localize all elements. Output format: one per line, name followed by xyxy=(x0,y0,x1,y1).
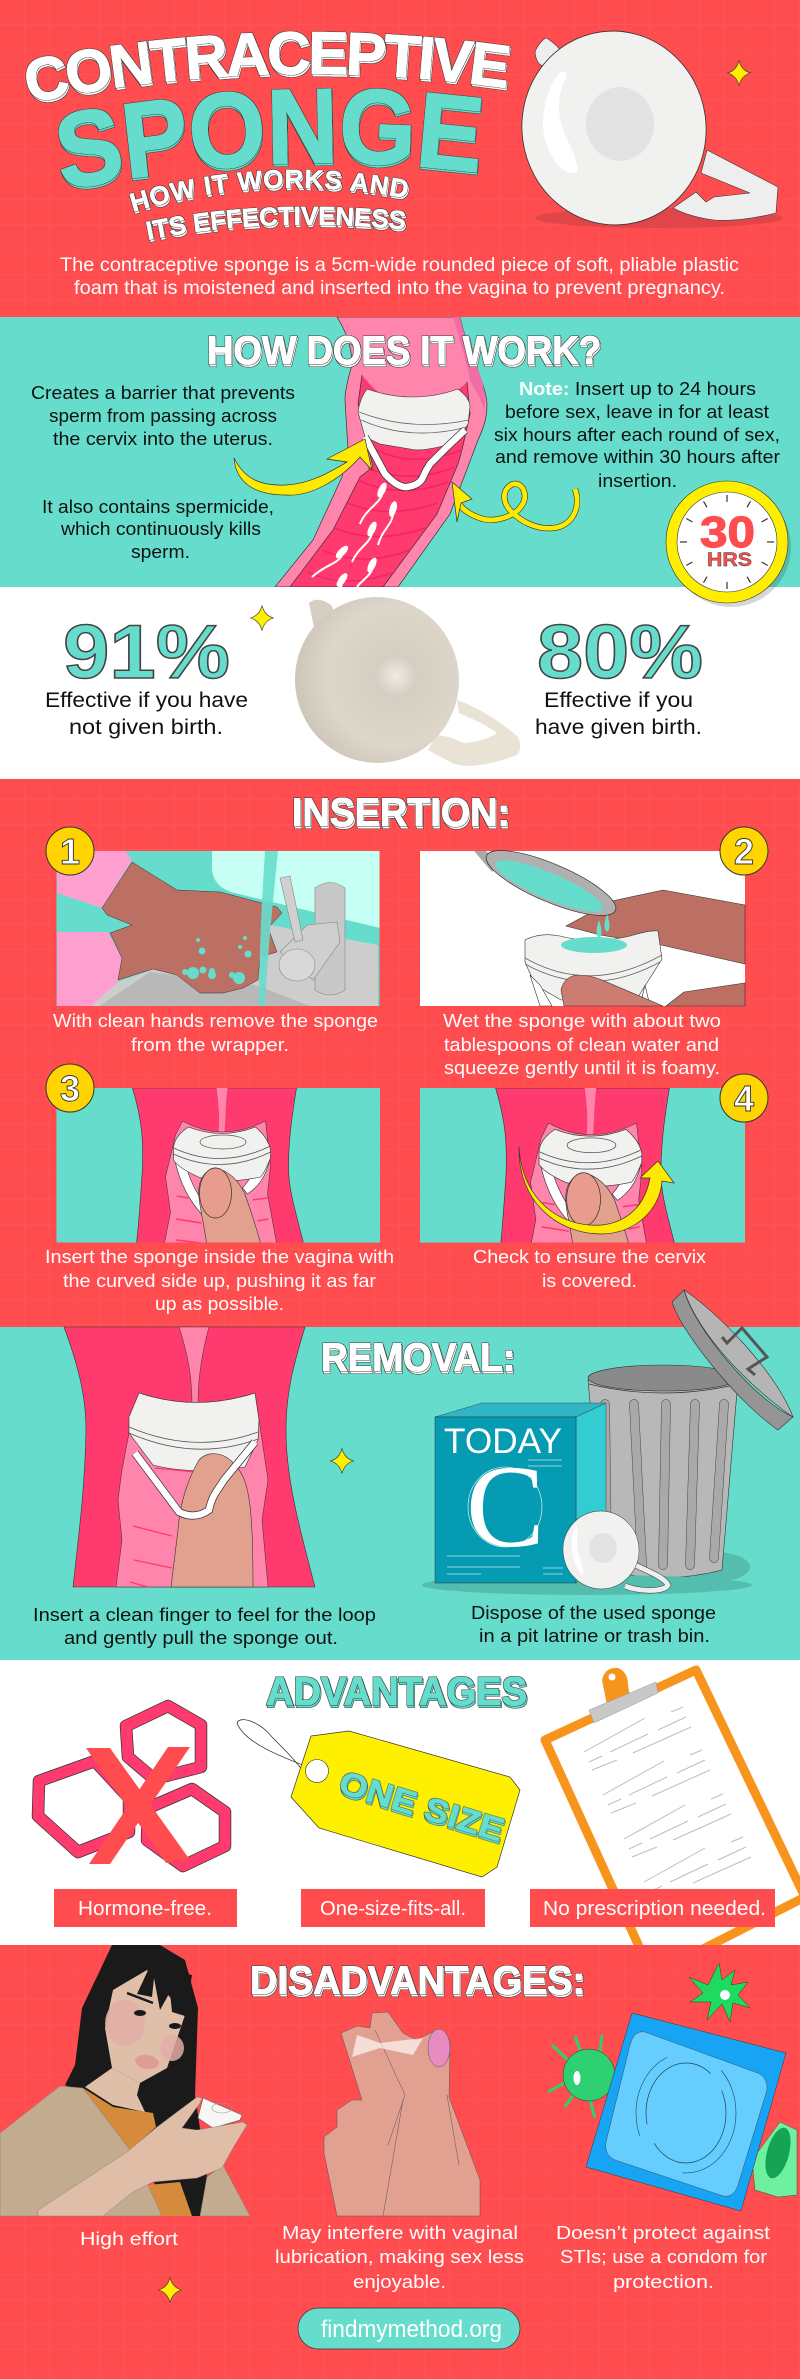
badge 1 xyxy=(46,827,94,875)
caption 2 xyxy=(443,1010,721,1078)
text: barrier: the cervix into the uterus. xyxy=(53,428,273,449)
caption 1: from the wrapper. xyxy=(131,1034,289,1055)
caption: dispose: Dispose of the used sponge xyxy=(471,1602,716,1623)
subtitle: ITS EFFECTIVENESS xyxy=(145,206,407,242)
text: spermicide xyxy=(42,496,274,562)
icon: one size tag: ONE SIZE xyxy=(335,1764,508,1848)
subtitle: HOW IT WORKS AND xyxy=(129,169,410,214)
note: six hours after each round of sex, xyxy=(494,424,780,445)
sparkle xyxy=(158,2278,182,2302)
caption: lubrication: May interfere with vaginal xyxy=(282,2222,518,2243)
badge 4 xyxy=(720,1074,768,1122)
note: insertion. xyxy=(598,470,677,491)
text: given birth: Effective if you xyxy=(544,689,693,712)
illustration: Today sponge box xyxy=(422,1403,752,1595)
step 4 image: checking cervix xyxy=(420,1088,745,1242)
text: not given birth: not given birth. xyxy=(69,716,223,739)
caption 4: is covered. xyxy=(542,1270,637,1291)
illustration: trash can xyxy=(588,1290,793,1582)
panel: removal xyxy=(0,1290,800,1660)
icon: clipboard xyxy=(545,1668,800,1975)
caption: dispose xyxy=(471,1602,716,1646)
icon: 30 hours clock: HRS xyxy=(707,550,752,571)
badge 4: 4 xyxy=(734,1078,754,1119)
text: spermicide: which continuously kills xyxy=(60,518,261,539)
caption 2: Wet the sponge with about two xyxy=(443,1010,721,1031)
panel: how does it work xyxy=(0,317,800,607)
caption 1 xyxy=(53,1010,378,1055)
caption: lubrication: lubrication, making sex less xyxy=(275,2246,524,2267)
stat: 91 percent: 91% xyxy=(63,610,230,695)
caption: STIs xyxy=(556,2222,770,2292)
caption: dispose: in a pit latrine or trash bin. xyxy=(479,1625,710,1646)
icon: white sponge xyxy=(509,19,783,237)
step 2 image: wetting sponge xyxy=(420,838,745,1006)
stat: 80 percent: 80% xyxy=(537,610,703,695)
caption 2: tablespoons of clean water and xyxy=(444,1034,719,1055)
illustration: condom and viruses xyxy=(548,1963,797,2211)
note xyxy=(494,378,780,491)
text: barrier: Creates a barrier that prevents xyxy=(31,382,295,403)
text: given birth xyxy=(535,689,702,739)
badge 2: 2 xyxy=(734,831,754,872)
illustration: removing sponge xyxy=(64,1327,315,1587)
caption: pull out xyxy=(33,1604,376,1648)
note: before sex, leave in for at least xyxy=(505,401,769,422)
arrow: step 4 xyxy=(519,1147,674,1234)
text: barrier: sperm from passing across xyxy=(49,405,277,426)
caption 2: squeeze gently until it is foamy. xyxy=(444,1057,720,1078)
panel: disadvantages xyxy=(0,1945,800,2379)
subtitle xyxy=(129,169,410,242)
caption 3: Insert the sponge inside the vagina with xyxy=(45,1246,394,1267)
label: one size: One-size-fits-all. xyxy=(320,1898,466,1920)
badge 3: 3 xyxy=(60,1068,80,1109)
note: and remove within 30 hours after xyxy=(495,446,780,467)
caption: lubrication xyxy=(275,2222,524,2292)
label: hormone-free xyxy=(54,1889,237,1927)
badge 3 xyxy=(46,1064,94,1112)
title: sponge: SPONGE xyxy=(58,88,482,190)
illustration: vaginal canal with sponge xyxy=(275,317,487,592)
text: given birth: have given birth. xyxy=(535,716,702,739)
panel: insertion xyxy=(0,779,800,1327)
text: not given birth xyxy=(45,689,248,739)
panel: advantages xyxy=(32,1666,800,1945)
badge 2 xyxy=(720,827,768,875)
label: no prescription xyxy=(530,1889,775,1927)
heading: HOW DOES IT WORK? xyxy=(207,329,601,373)
label: hormone-free: Hormone-free. xyxy=(78,1898,212,1920)
label: one size xyxy=(301,1889,485,1927)
title: contraceptive: CONTRACEPTIVE xyxy=(26,30,512,103)
icon: one size tag xyxy=(237,1720,520,1877)
sparkle xyxy=(330,1448,354,1474)
caption 3: the curved side up, pushing it as far xyxy=(63,1270,376,1291)
caption: lubrication: enjoyable. xyxy=(353,2271,446,2292)
heading: ADVANTAGES xyxy=(266,1670,527,1714)
icon: 30 hours clock xyxy=(666,481,791,607)
icon: 30 hours clock: 30 xyxy=(700,508,755,557)
badge 1: 1 xyxy=(60,831,80,872)
caption: high effort: High effort xyxy=(80,2228,178,2249)
illustration: Today sponge box: TODAY xyxy=(444,1422,562,1461)
arrow: left yellow xyxy=(234,439,372,495)
panel: header xyxy=(0,0,800,317)
caption: pull out: Insert a clean finger to feel for the loop xyxy=(33,1604,376,1625)
caption 3: up as possible. xyxy=(155,1293,284,1314)
text: spermicide: sperm. xyxy=(131,541,190,562)
text: barrier xyxy=(31,382,295,449)
caption: STIs: Doesn’t protect against xyxy=(556,2222,770,2243)
caption: pull out: and gently pull the sponge out. xyxy=(64,1627,338,1648)
caption 4 xyxy=(473,1246,707,1291)
intro text: The contraceptive sponge is a 5cm-wide rounded piece of soft, pliable plastic xyxy=(60,254,739,276)
text: not given birth: Effective if you have xyxy=(45,689,248,712)
illustration: fingers xyxy=(324,2012,480,2216)
website pill xyxy=(298,2308,520,2349)
intro text xyxy=(60,254,739,299)
sparkle xyxy=(728,60,750,86)
step 3 image: inserting sponge xyxy=(56,1088,380,1242)
caption 1: With clean hands remove the sponge xyxy=(53,1010,378,1031)
intro text: foam that is moistened and inserted into the vagina to prevent pregnancy. xyxy=(74,277,725,299)
icon: hormone hexagons crossed out xyxy=(38,1706,225,1866)
label: no prescription: No prescription needed. xyxy=(543,1898,766,1920)
website pill: findmymethod.org xyxy=(321,2316,502,2343)
text: spermicide: It also contains spermicide, xyxy=(42,496,274,517)
caption 3 xyxy=(45,1246,394,1314)
icon: beige sponge photo xyxy=(280,582,520,778)
note: Note: Insert up to 24 hours xyxy=(519,378,756,399)
heading: REMOVAL: xyxy=(321,1336,515,1380)
heading: DISADVANTAGES: xyxy=(250,1959,585,2003)
illustration: woman holding sponge xyxy=(0,1945,250,2216)
caption: STIs: STIs; use a condom for xyxy=(560,2246,767,2267)
panel: stats background and effectiveness xyxy=(0,582,800,779)
arrow: right looping yellow xyxy=(452,482,577,528)
heading: INSERTION: xyxy=(292,791,510,835)
step 1 image: washing hands xyxy=(56,851,380,1007)
illustration: Today sponge box: C xyxy=(466,1441,545,1572)
caption 4: Check to ensure the cervix xyxy=(473,1246,707,1267)
sparkle xyxy=(250,606,274,630)
caption: STIs: protection. xyxy=(613,2271,714,2292)
icon: small used sponge xyxy=(558,1506,668,1594)
